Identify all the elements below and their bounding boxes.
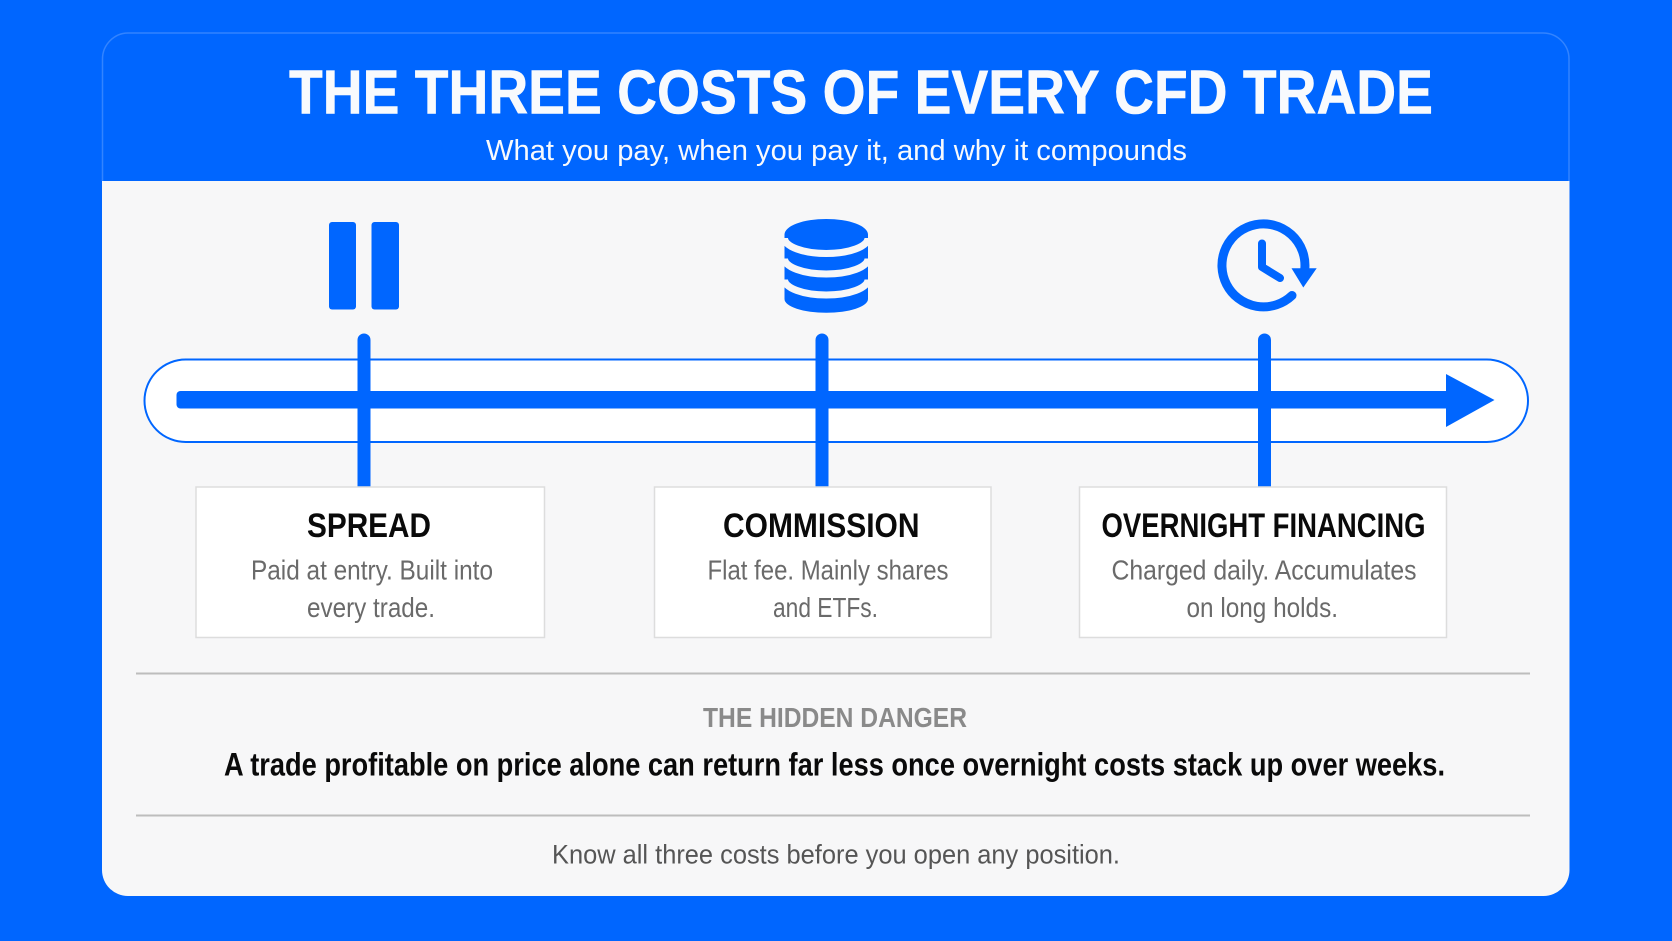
panel: commission [654,487,991,638]
footer note: Know all three costs before you open any position. [552,840,1120,870]
subtitle: What you pay, when you pay it, and why it compounds [486,135,1187,167]
icon: commission coin stack [784,219,868,313]
commission description: Flat fee. Mainly shares [708,554,948,586]
icon: spread bars [329,222,399,310]
title: THE THREE COSTS OF EVERY CFD TRADE [289,58,1433,128]
commission heading: COMMISSION [723,507,920,545]
hidden danger statement: A trade profitable on price alone can return far less once overnight costs stack up over weeks. [224,746,1445,782]
overnight heading: OVERNIGHT FINANCING [1102,507,1426,545]
spread description: Paid at entry. Built into [251,554,493,586]
icon: overnight clock [1222,224,1317,307]
timeline tick: commission [816,334,828,487]
spread description [251,554,493,623]
overnight description: on long holds. [1186,592,1338,623]
panel: overnight financing [1080,487,1446,638]
spread description: every trade. [307,592,435,623]
overnight description: Charged daily. Accumulates [1112,554,1416,586]
commission description: and ETFs. [773,592,878,623]
hidden danger label: THE HIDDEN DANGER [703,702,967,733]
timeline arrow [176,374,1494,427]
timeline tick: spread [358,334,370,487]
spread heading: SPREAD [307,507,431,545]
timeline tick: overnight [1258,334,1271,487]
overnight description [1112,554,1416,623]
panel: spread [196,487,544,638]
commission description [708,554,948,623]
header band [102,33,1569,181]
timeline track [144,360,1528,442]
